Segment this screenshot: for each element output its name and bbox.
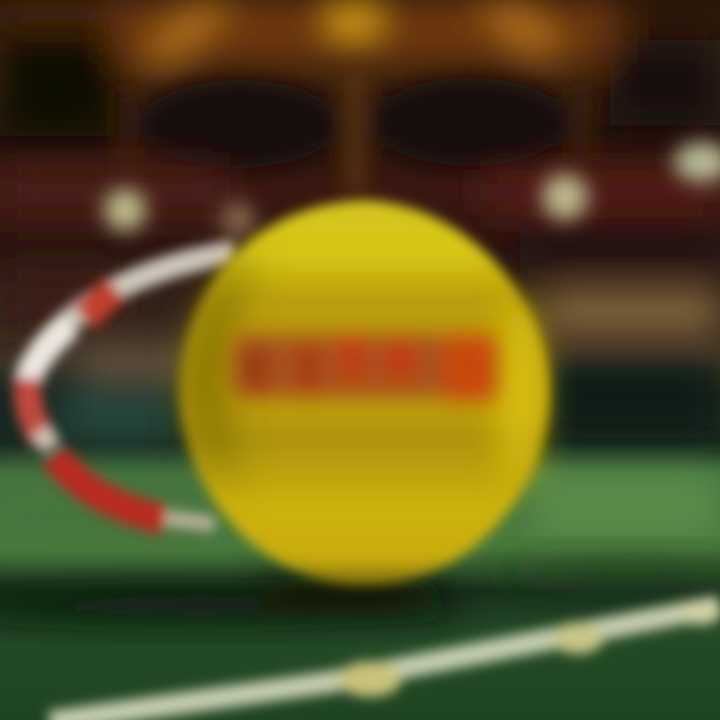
- stadium light spots: [104, 142, 720, 238]
- dark stand openings: [118, 70, 590, 190]
- white court line: [50, 599, 720, 720]
- tennis ball: [180, 200, 550, 585]
- court highlight: [0, 470, 720, 550]
- striped ring behind ball: [28, 252, 235, 524]
- ball red lettering: [232, 335, 497, 400]
- ball shading: [182, 250, 540, 490]
- stadium roof lights: [0, 0, 720, 136]
- stand seating bands: [0, 165, 720, 438]
- ball shadow on court: [0, 560, 720, 620]
